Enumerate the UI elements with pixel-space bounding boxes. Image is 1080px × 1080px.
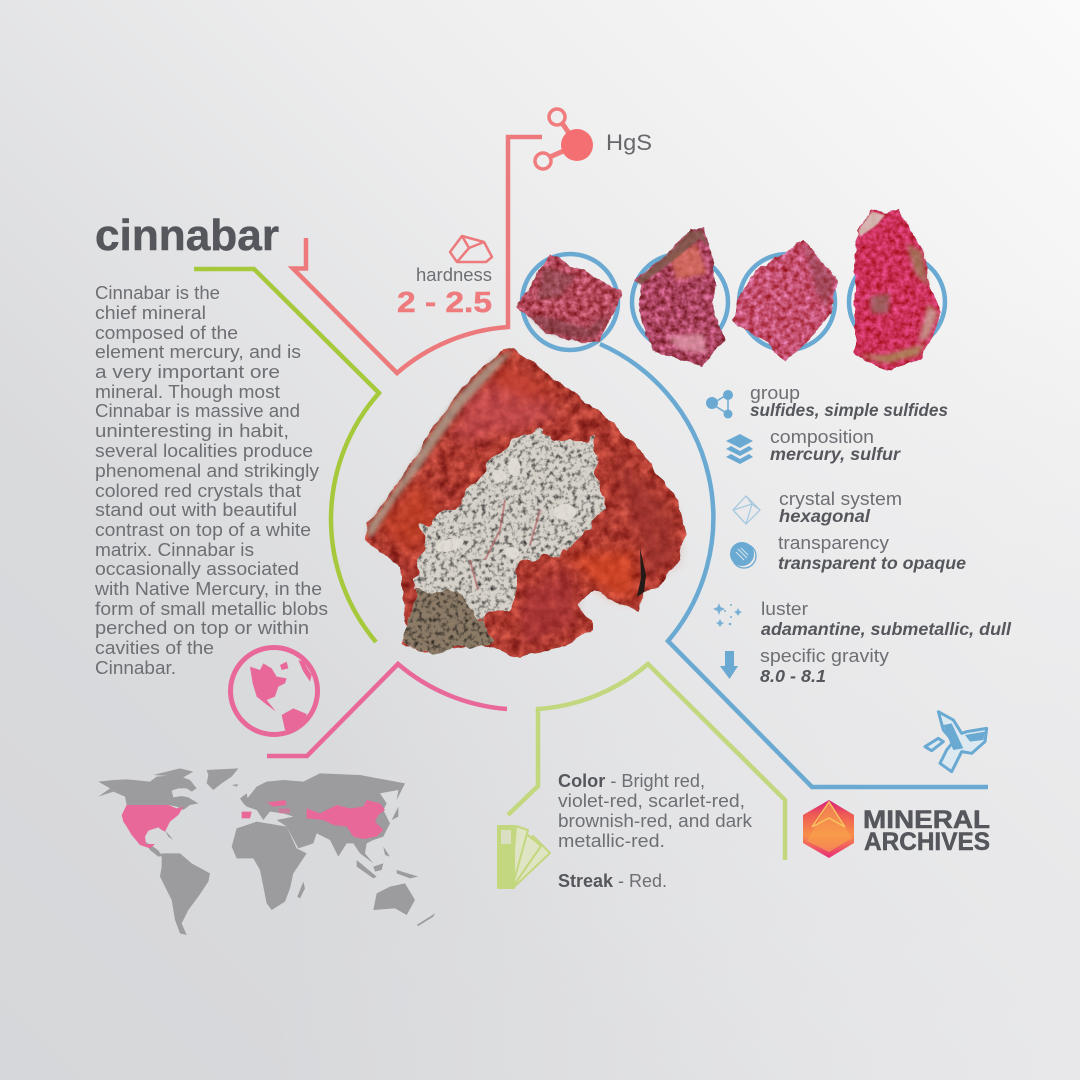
title: cinnabar (95, 211, 279, 260)
color and streak text: brownish-red, and dark (558, 811, 753, 831)
color and streak text: Color - Bright red, (558, 771, 705, 791)
connector: blue properties line (600, 344, 988, 787)
description text block: Cinnabar. (95, 658, 176, 678)
description text block: occasionally associated (95, 559, 299, 579)
transparency value: transparent to opaque (778, 553, 966, 573)
luster value: adamantine, submetallic, dull (761, 619, 1012, 639)
logo hexagon (803, 800, 854, 858)
description text block: stand out with beautiful (95, 500, 297, 520)
description text block: composed of the (95, 323, 238, 343)
description text block: cavities of the (95, 638, 214, 658)
icon: composition layers (726, 434, 753, 464)
color and streak text (558, 771, 753, 891)
specimen photos row (517, 210, 942, 370)
icon: luster sparkles (713, 603, 742, 627)
icon: gravity arrow (720, 651, 738, 679)
description text block (94, 283, 328, 678)
crystal system value: hexagonal (779, 506, 871, 526)
specimen 2 (633, 227, 725, 367)
group value: sulfides, simple sulfides (750, 400, 948, 420)
specimen 3 (733, 240, 838, 360)
icon: hardness rock (450, 236, 492, 262)
icon: color swatch fan (498, 826, 550, 888)
icon: group (706, 390, 733, 418)
description text block: chief mineral (95, 303, 206, 323)
grey land masses (98, 768, 435, 935)
icon: transparency (730, 542, 756, 568)
composition value: mercury, sulfur (770, 444, 901, 464)
logo wordmark: MINERAL (863, 806, 990, 834)
specific gravity label: specific gravity (760, 646, 889, 666)
small circles behind specimens (522, 254, 945, 350)
main cinnabar specimen photo (365, 348, 685, 658)
hardness label: hardness (416, 265, 492, 285)
description text block: several localities produce (95, 441, 313, 461)
hardness value: 2 - 2.5 (397, 287, 492, 319)
color and streak text: metallic-red. (558, 831, 665, 851)
icon: globe (230, 648, 318, 734)
specimen 4 (855, 210, 942, 370)
color and streak text: Streak - Red. (558, 871, 667, 891)
description text block: with Native Mercury, in the (94, 579, 322, 599)
description text block: perched on top or within (95, 618, 309, 638)
description text block: form of small metallic blobs (95, 599, 328, 619)
specimen 1 (517, 255, 622, 342)
description text block: contrast on top of a white (95, 520, 311, 540)
luster label: luster (761, 599, 808, 619)
description text block: uninteresting in habit, (95, 421, 289, 441)
description text block: element mercury, and is (95, 342, 301, 362)
color and streak text: violet-red, scarlet-red, (558, 791, 745, 811)
logo: Mineral Archives (803, 800, 990, 858)
description text block: mineral. Though most (95, 382, 280, 402)
crystal system label: crystal system (779, 489, 902, 509)
composition label: composition (770, 427, 874, 447)
description text block: phenomenal and strikingly (95, 461, 319, 481)
group label: group (750, 383, 800, 403)
pink distribution countries (122, 800, 385, 848)
connector: green left arc (194, 269, 379, 642)
description text block: matrix. Cinnabar is (95, 540, 254, 560)
icon: crystal system (733, 496, 760, 524)
description text block: Cinnabar is massive and (95, 401, 300, 421)
specific gravity value: 8.0 - 8.1 (760, 666, 826, 686)
icon: crystal cluster (925, 712, 987, 772)
icon: molecule (535, 109, 593, 169)
logo: Mineral Archives: ARCHIVES (864, 828, 990, 856)
description text block: a very important ore (95, 362, 280, 382)
transparency label: transparency (778, 533, 889, 553)
description text block: colored red crystals that (95, 481, 301, 501)
connector: pink distribution line (267, 664, 507, 756)
connector: light green color line (508, 664, 785, 860)
formula: HgS (606, 130, 652, 155)
properties list (706, 383, 1012, 686)
connector: red hardness and formula line (293, 137, 542, 373)
world map (98, 768, 435, 935)
description text block: Cinnabar is the (95, 283, 220, 303)
